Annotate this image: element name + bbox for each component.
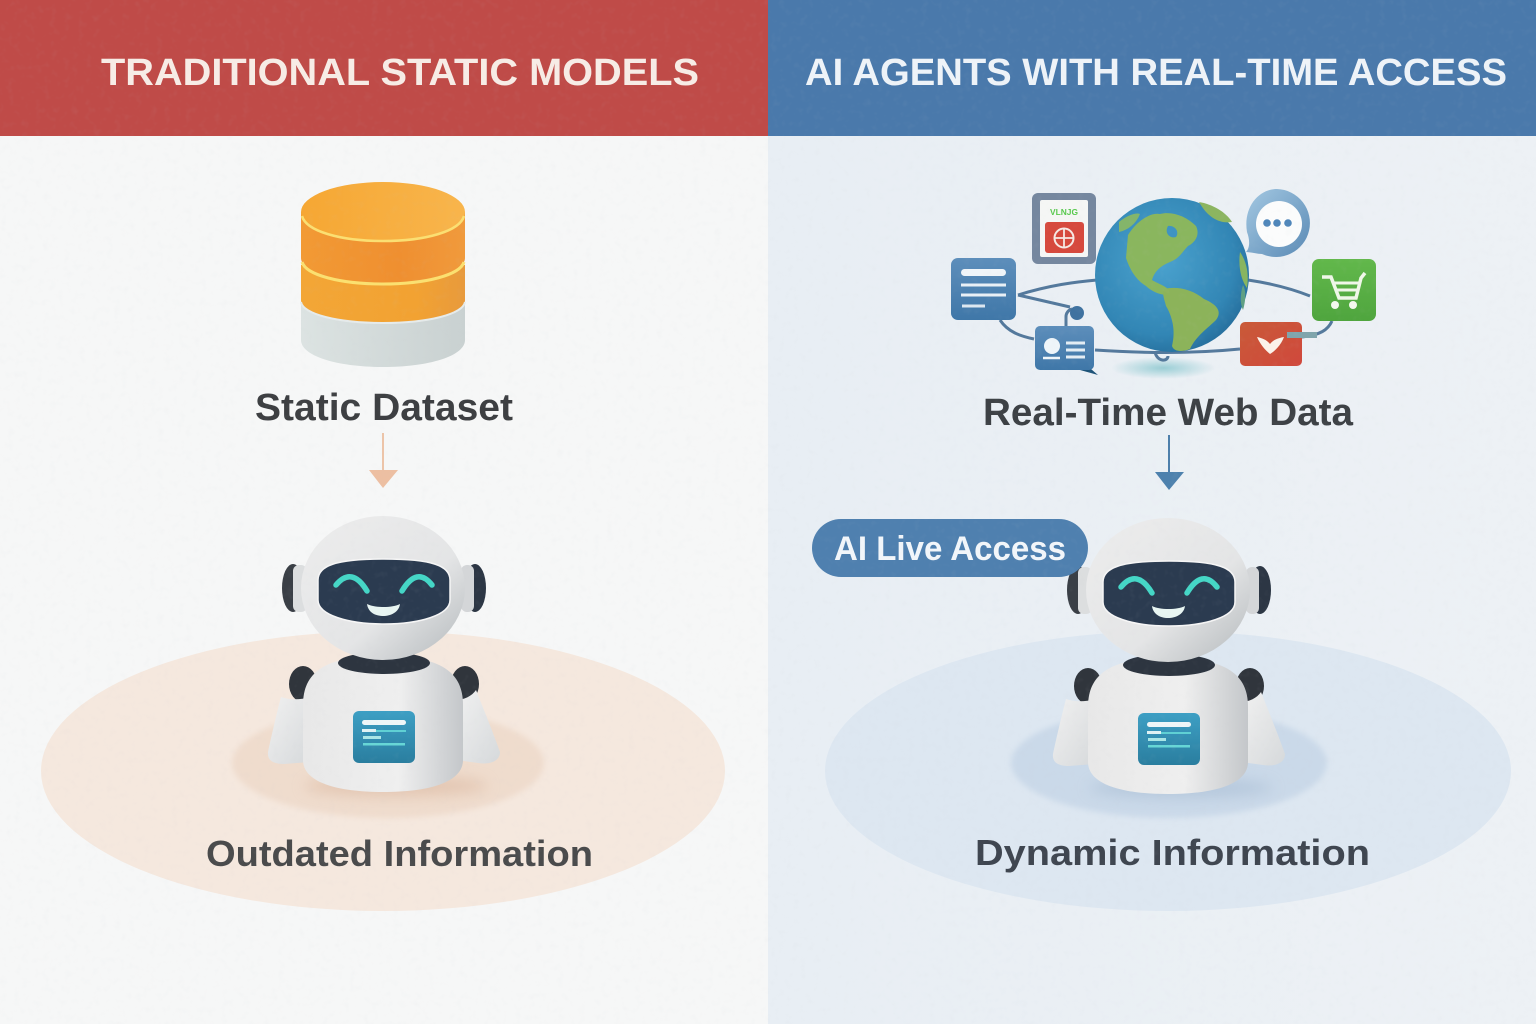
profile card icon <box>1035 326 1098 375</box>
app window icon <box>1032 193 1096 264</box>
robot: AI agent <box>1053 518 1285 798</box>
ears <box>1067 566 1089 614</box>
label: real-time web data: Real-Time Web Data <box>983 392 1354 434</box>
callout: AI live access <box>812 519 1088 577</box>
right shoulder <box>451 666 479 702</box>
right arm <box>1241 692 1285 766</box>
neck <box>1123 654 1215 676</box>
panel: left background <box>0 0 768 1024</box>
left shoulder <box>1074 668 1102 704</box>
label: static dataset: Static Dataset <box>255 387 513 429</box>
eyes <box>1121 579 1217 593</box>
left arm <box>268 697 310 764</box>
neck <box>338 652 430 674</box>
mouth <box>1152 606 1185 618</box>
glow beneath globe <box>1111 357 1215 379</box>
robot: traditional model <box>268 516 500 796</box>
globe <box>1095 198 1249 352</box>
chest screen <box>353 711 415 763</box>
orbit lines <box>1000 280 1332 360</box>
eyes <box>336 577 432 591</box>
icon cluster: real-time web data <box>951 189 1376 379</box>
right shoulder <box>1236 668 1264 704</box>
arrow: dataset to robot <box>369 433 398 488</box>
icon: static dataset cylinder <box>301 182 465 367</box>
left arm <box>1053 699 1095 766</box>
arrow: web data to robot <box>1155 435 1184 490</box>
shopping cart icon <box>1312 259 1376 321</box>
floor shadow <box>304 776 488 796</box>
right inner ellipse <box>1011 708 1327 818</box>
document list icon <box>951 258 1016 320</box>
app window icon: VLNJG <box>1050 208 1078 217</box>
left shoulder <box>289 666 317 702</box>
chest screen <box>1138 713 1200 765</box>
checkmark tag icon <box>1240 322 1317 366</box>
visor <box>1103 561 1235 626</box>
right base ellipse <box>825 631 1511 911</box>
callout: AI live access: AI Live Access <box>834 530 1066 568</box>
label: dynamic information: Dynamic Information <box>975 832 1370 873</box>
left inner ellipse <box>232 708 544 818</box>
visor <box>318 559 450 624</box>
panel: left header band <box>0 0 768 136</box>
ears <box>282 564 304 612</box>
left base ellipse <box>41 631 725 911</box>
right arm <box>456 690 500 764</box>
panel: right header band <box>768 0 1536 136</box>
head <box>1086 518 1250 662</box>
heading: traditional static models: TRADITIONAL STATIC MODELS <box>101 52 699 94</box>
heading: AI agents with real-time access: AI AGENTS WITH REAL-TIME ACCESS <box>805 52 1507 94</box>
torso <box>1088 658 1248 794</box>
chat bubble icon <box>1246 189 1310 257</box>
torso <box>303 656 463 792</box>
head <box>301 516 465 660</box>
panel: right background <box>768 0 1536 1024</box>
mouth <box>367 604 400 616</box>
label: outdated information: Outdated Information <box>206 833 593 874</box>
floor shadow <box>1089 778 1273 798</box>
